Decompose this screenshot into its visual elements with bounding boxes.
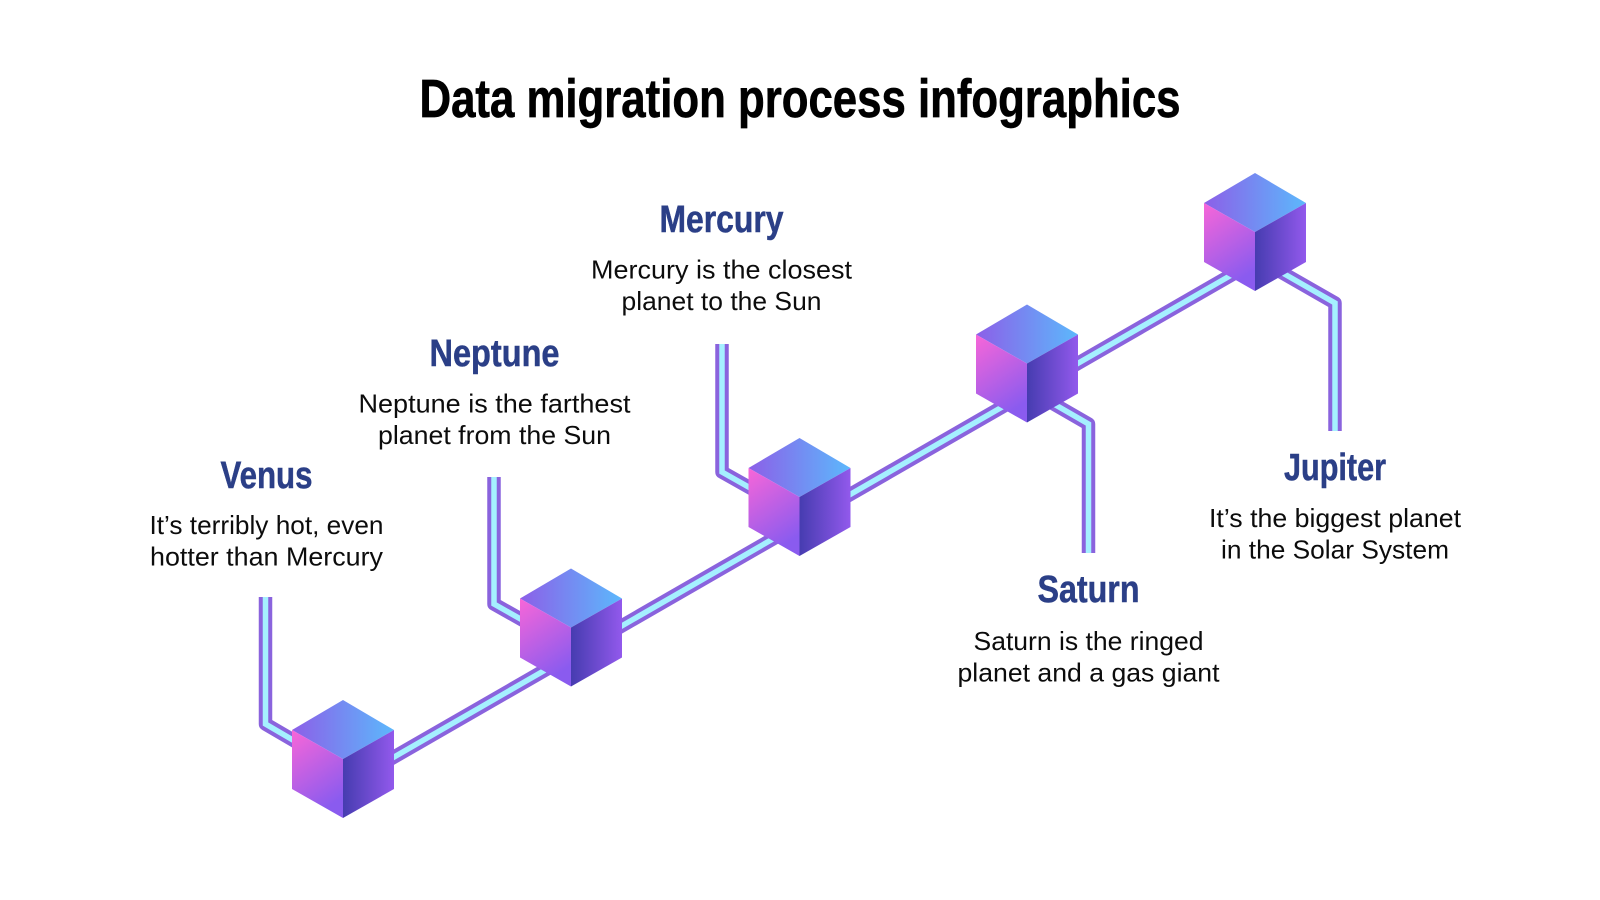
cube: Mercury: [748, 438, 850, 556]
connector: Neptune: [494, 477, 540, 630]
cube: Neptune: [520, 568, 622, 686]
cube: Venus: [292, 700, 394, 818]
text block: Neptune: Neptune is the farthest: [358, 388, 631, 418]
text block: Saturn: Saturn is the ringed: [974, 626, 1204, 656]
title: Data migration process infographics: [420, 69, 1180, 129]
connector: Jupiter: [1260, 260, 1335, 431]
text block: Venus: It’s terribly hot, even: [150, 510, 384, 540]
text block: Jupiter: Jupiter: [1284, 447, 1386, 489]
text block: Venus: Venus: [220, 455, 312, 497]
text block: Saturn: Saturn: [1038, 569, 1140, 611]
text block: Jupiter: It’s the biggest planet: [1209, 503, 1462, 533]
text block: Jupiter: in the Solar System: [1221, 534, 1449, 564]
text block: Venus: [150, 455, 384, 572]
text block: Neptune: Neptune: [430, 333, 560, 375]
text block: Saturn: [958, 569, 1220, 688]
cube: Jupiter: [1204, 173, 1306, 291]
text block: Venus: hotter than Mercury: [150, 542, 383, 572]
text block: Neptune: planet from the Sun: [378, 420, 611, 450]
connector: Mercury: [722, 344, 768, 498]
text block: Mercury: Mercury is the closest: [591, 254, 853, 284]
text block: Neptune: [358, 333, 631, 450]
cube: Saturn: [976, 304, 1078, 422]
text block: Mercury: Mercury: [660, 199, 784, 241]
text block: Mercury: planet to the Sun: [622, 286, 822, 316]
connector: Venus: [266, 597, 310, 750]
main connector pipe: [342, 262, 1254, 787]
connector: Saturn: [1040, 396, 1088, 553]
text block: Jupiter: [1209, 447, 1462, 564]
text block: Mercury: [591, 199, 853, 316]
text block: Saturn: planet and a gas giant: [958, 658, 1220, 688]
